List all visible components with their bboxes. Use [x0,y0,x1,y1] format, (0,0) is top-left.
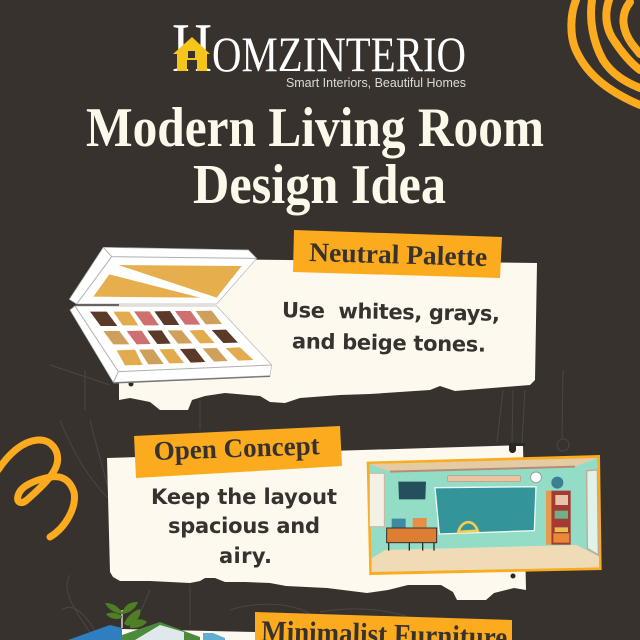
classroom shelf [546,477,571,545]
panel: neutral palette paper [119,258,537,410]
panel: open concept paper [107,445,526,600]
classroom projector screen [447,476,521,482]
classroom ceiling [369,458,597,472]
palette swatches [90,311,253,365]
classroom window [369,473,384,527]
text: open concept body [151,485,337,568]
text: open concept body: spacious and [168,514,320,538]
classroom clock [531,472,541,483]
text: neutral palette body: Use whites, grays, [282,298,500,326]
tag: Open Concept: Open Concept [153,430,320,466]
text: open concept body: airy. [219,544,272,568]
dark drips on paper edge [128,382,525,578]
room walls [68,625,122,640]
classroom floor [372,545,599,572]
room floor [122,629,255,640]
palette lid [69,247,257,304]
decorative spiral top right [571,0,640,105]
classroom frame [367,455,602,575]
tag: Open Concept [134,426,342,478]
logo wordmark: OMZINTERIO [212,26,466,82]
decorative squiggle left [0,440,74,537]
text: open concept body: Keep the layout [151,485,337,509]
logo house icon [173,37,210,71]
room plant [105,602,147,628]
text: neutral palette body [282,298,500,357]
logo tagline: Smart Interiors, Beautiful Homes [286,75,466,90]
image: minimalist room [68,602,255,640]
logo H letter: H [172,10,212,87]
tag: Neutral Palette [293,230,502,278]
classroom desk [387,518,437,551]
icon: eyeshadow palette [69,247,272,383]
tag: Neutral Palette: Neutral Palette [309,237,488,272]
classroom TV [398,482,426,499]
classroom blackboard [435,487,536,534]
palette base [70,306,272,382]
image: classroom [367,455,602,575]
title: Design Idea [193,154,446,216]
title [86,97,544,216]
text: neutral palette body: and beige tones. [292,329,486,357]
title: Modern Living Room [86,97,544,159]
logo [172,10,466,90]
classroom door [587,470,598,555]
